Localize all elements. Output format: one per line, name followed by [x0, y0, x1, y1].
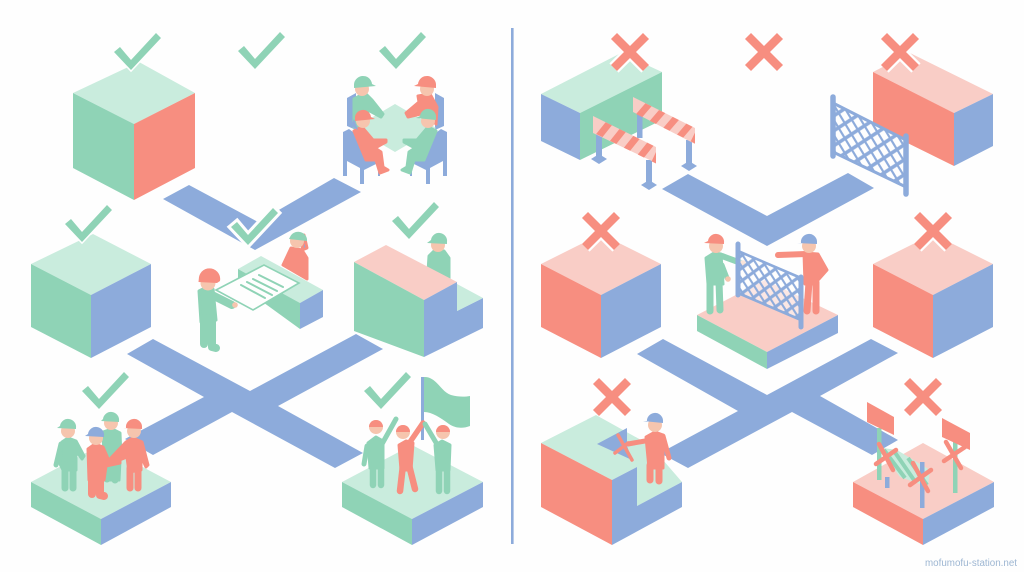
scene: two workers split by a fence [697, 234, 838, 369]
crossed markers [876, 442, 965, 491]
box: coral and blue, fenced [873, 53, 993, 166]
man with paper [198, 268, 238, 348]
banner [877, 447, 930, 487]
scene: team on a platform [31, 412, 171, 545]
X mark: top left [614, 36, 646, 68]
person centre coral blue cap [85, 427, 120, 496]
central fence [738, 244, 801, 327]
sign boards [867, 402, 970, 450]
scene: team raising a flag [342, 377, 483, 545]
cube: green and blue [31, 234, 151, 358]
paper [216, 265, 299, 310]
barrier: front [591, 116, 657, 190]
check mark: outlined centre [231, 208, 278, 245]
road: right upper V path [662, 173, 874, 246]
cube: coral and blue, left [541, 234, 661, 358]
person left green [56, 419, 84, 488]
front right person [402, 109, 436, 173]
panel: negative side [541, 36, 994, 545]
road: left upper V path [163, 178, 361, 250]
small crossed marker [615, 435, 632, 460]
back right person [406, 76, 437, 124]
worker right [778, 234, 827, 311]
cube: coral and blue, right [873, 234, 993, 358]
worker behind block [427, 233, 449, 284]
X mark: bottom right [907, 381, 939, 413]
panel: positive side [31, 32, 483, 545]
front right chair [410, 129, 447, 184]
check mark: middle left [65, 205, 112, 242]
scene: meeting around a table [343, 76, 447, 184]
flag [421, 377, 470, 440]
worker [628, 413, 669, 481]
front left chair [343, 129, 380, 184]
X mark: bottom left [596, 381, 628, 413]
scene: handing over a document [198, 232, 323, 348]
check mark: bottom right [364, 372, 411, 409]
X mark: top right [884, 36, 916, 68]
divider [511, 28, 514, 544]
worker left [704, 234, 746, 311]
person left [364, 419, 396, 485]
road: right lower cross path [637, 339, 898, 468]
platform with fallen signs [853, 402, 994, 545]
sign posts [877, 428, 958, 508]
front left person [351, 110, 388, 173]
check mark: top center [238, 32, 285, 69]
person centre [396, 423, 423, 491]
check mark: middle right [392, 202, 439, 239]
counter block [238, 256, 323, 303]
check mark: top right [379, 32, 426, 69]
watermark: mofumofu-station.net [925, 558, 1017, 569]
cube: green and coral [73, 62, 195, 200]
X mark: middle right [917, 215, 949, 247]
X mark: top centre [748, 36, 780, 68]
person back green [101, 412, 121, 480]
person right coral [109, 419, 148, 488]
person right [425, 424, 450, 491]
barrier: back [633, 97, 697, 171]
stepped box with notch and worker [541, 413, 682, 545]
X mark: middle left [585, 215, 617, 247]
check mark: bottom left [82, 372, 129, 409]
road: left lower cross path [125, 334, 383, 468]
fence [833, 97, 906, 194]
box: green and blue, blocked [541, 53, 662, 160]
check mark: top left [114, 33, 161, 70]
back left person [354, 76, 383, 127]
table [354, 104, 436, 152]
scene: stepped block with worker [354, 233, 483, 357]
woman behind counter [283, 232, 307, 279]
back chairs [347, 93, 356, 130]
